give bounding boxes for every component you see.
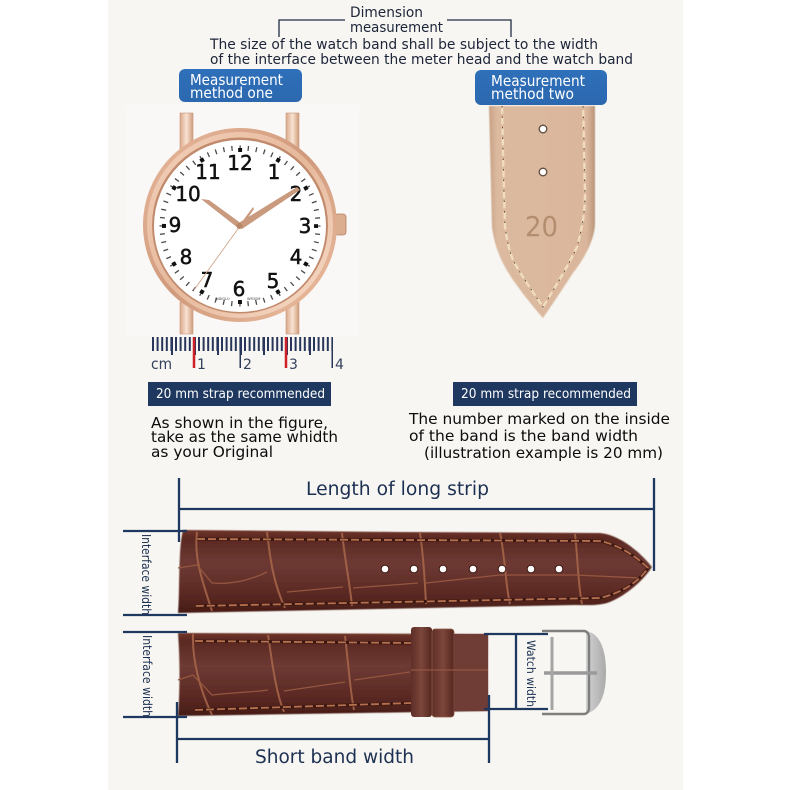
long strap (178, 530, 652, 613)
method one text: as your Original (151, 443, 273, 461)
method one badge: Measurement (190, 71, 283, 89)
numerals: 2 (290, 182, 302, 206)
method two strap (489, 106, 595, 318)
short strap (178, 627, 488, 717)
method one badge (179, 69, 302, 102)
buckle plate (586, 631, 606, 714)
method two text: (illustration example is 20 mm) (424, 444, 663, 462)
beige strap body (489, 106, 595, 318)
long strap body (178, 530, 652, 613)
method two text: The number marked on the inside (408, 410, 670, 428)
numerals: 3 (299, 214, 311, 238)
instruction text (209, 37, 633, 68)
method two text (408, 410, 670, 462)
crocodile seams (196, 532, 582, 611)
crocodile cross lines (178, 565, 640, 592)
method two badge (475, 70, 607, 105)
short band label: Short band width (255, 747, 414, 768)
hour dots (164, 150, 316, 302)
watch width label backdrop (520, 637, 541, 708)
numerals: 4 (290, 245, 302, 269)
short strap seams (193, 634, 354, 715)
tiny dial marks: WR30M (247, 297, 260, 301)
strap end (454, 634, 488, 711)
heading: dimension measurement: measurement (350, 20, 443, 36)
buckle frame (542, 631, 589, 714)
minute ticks (162, 148, 318, 304)
interface width label upper: Interface width (139, 534, 153, 615)
numerals: 11 (195, 160, 221, 184)
ruler labels: cm (151, 355, 172, 373)
numerals: 8 (180, 245, 192, 269)
heading: dimension measurement (350, 5, 443, 36)
case (143, 128, 337, 322)
short strap body (178, 633, 488, 716)
numerals: 10 (175, 182, 201, 206)
method one text: take as the same whidth (151, 428, 338, 446)
buckle pin (544, 671, 597, 675)
ruler labels: 2 (243, 357, 252, 373)
heading: dimension measurement: Dimension (350, 5, 423, 21)
recommendation badge one (148, 382, 331, 406)
strap keeper one (411, 627, 432, 717)
method one text (151, 414, 338, 461)
tiny dial marks: INDIGLO (215, 297, 230, 301)
strap keeper two (432, 629, 454, 717)
hands (194, 187, 300, 290)
crown (335, 214, 346, 235)
numerals: 9 (169, 213, 181, 237)
ruler labels: 4 (335, 357, 344, 373)
short strap stitches (195, 641, 411, 710)
short strap stitching (195, 641, 411, 710)
long strap stitches (195, 539, 648, 606)
ruler (152, 337, 333, 368)
long strip label: Length of long strip (306, 479, 489, 500)
dial (154, 140, 326, 312)
method one badge: method one (190, 84, 273, 102)
method one text: As shown in the figure, (151, 414, 328, 432)
numerals: 7 (201, 268, 213, 292)
stitching (502, 106, 585, 307)
method two badge: Measurement (491, 72, 585, 90)
background panel (108, 0, 683, 790)
interface width label lower: Interface width (140, 635, 154, 717)
numerals: 1 (268, 160, 280, 184)
lugs (180, 113, 299, 334)
keeper cross line (411, 669, 488, 671)
numerals: 5 (267, 269, 279, 293)
dimension lines (123, 478, 654, 763)
numerals (169, 151, 311, 301)
numerals: 12 (227, 151, 253, 175)
buckle (542, 631, 606, 714)
recommendation badge one: 20 mm strap recommended (156, 387, 325, 402)
watch (143, 113, 346, 334)
instruction text: The size of the watch band shall be subject to the width (209, 37, 598, 53)
tiny dial marks (215, 297, 260, 301)
short strap cross lines (178, 672, 410, 695)
long strap stitching (195, 539, 648, 606)
recommendation badge two: 20 mm strap recommended (461, 387, 631, 402)
method two badge: method two (491, 85, 574, 103)
long strap holes (381, 565, 563, 573)
ruler labels: 1 (197, 357, 206, 373)
numerals: 6 (233, 277, 245, 301)
ruler labels: 3 (289, 357, 298, 373)
recommendation badge two (453, 382, 637, 406)
buckle spring bar (550, 637, 554, 710)
stamped number: 20 (525, 210, 558, 243)
ruler labels (151, 355, 344, 373)
instruction text: of the interface between the meter head and the watch band (210, 52, 633, 68)
ruler red marks (194, 337, 286, 368)
watch photo backdrop (125, 105, 359, 337)
method two text: of the band is the band width (409, 427, 638, 445)
watch width label: Watch width (524, 640, 538, 707)
heading bracket (279, 20, 511, 37)
stitch holes (502, 106, 585, 307)
strap holes (539, 125, 547, 176)
